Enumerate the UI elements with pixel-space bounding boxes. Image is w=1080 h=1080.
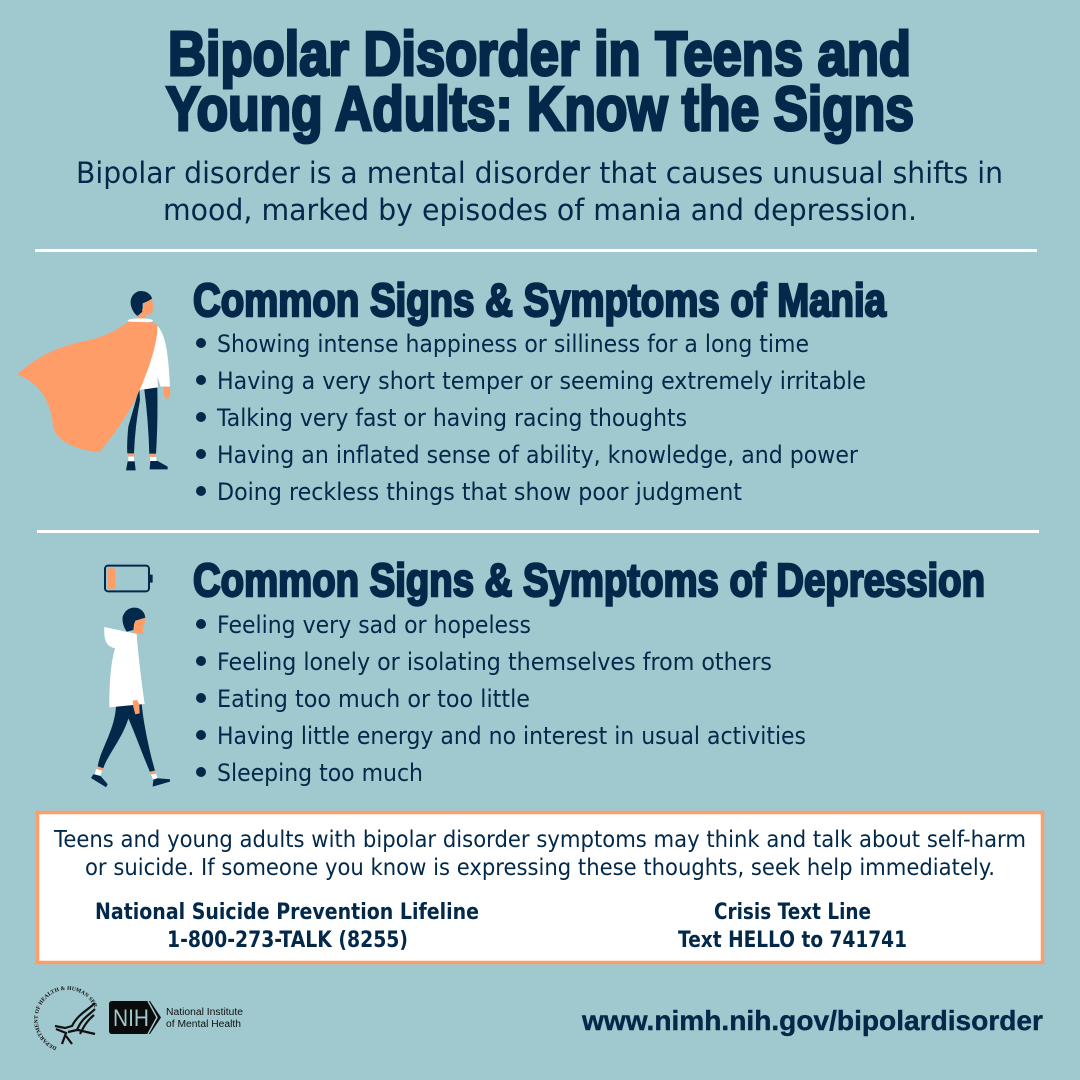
title	[166, 20, 914, 144]
mania symptom list: Doing reckless things that show poor judgment	[217, 478, 742, 506]
icon: low battery	[105, 566, 153, 591]
crisis text line contact: Crisis Text Line	[714, 899, 871, 925]
mania symptom list	[196, 330, 866, 506]
warning text: or suicide. If someone you know is expressing these thoughts, seek help immediately.	[85, 855, 995, 881]
intro text: Bipolar disorder is a mental disorder that causes unusual shifts in	[76, 156, 1003, 190]
NIH logo: of Mental Health	[166, 1019, 241, 1030]
icon: superhero figure with cape	[17, 291, 170, 470]
NIH logo: NIH	[113, 1005, 149, 1032]
HHS logo	[34, 986, 98, 1050]
crisis text line contact: Text HELLO to 741741	[678, 927, 907, 953]
depression symptom list: Having little energy and no interest in usual activities	[217, 722, 806, 750]
mania symptom list: Having an inflated sense of ability, knowledge, and power	[217, 441, 858, 469]
NIH logo: National Institute	[166, 1007, 243, 1018]
intro text	[76, 156, 1003, 227]
warning text: Teens and young adults with bipolar disorder symptoms may think and talk about self-harm	[53, 827, 1026, 853]
intro text: mood, marked by episodes of mania and depression.	[163, 193, 917, 227]
lifeline contact	[95, 899, 479, 953]
crisis text line contact	[678, 899, 907, 953]
website url: www.nimh.nih.gov/bipolardisorder	[581, 1005, 1043, 1036]
NIH logo	[109, 1001, 243, 1034]
HHS logo: DEPARTMENT OF HEALTH & HUMAN SERVICES · USA	[34, 986, 98, 1050]
depression symptom list: Feeling lonely or isolating themselves from others	[217, 648, 772, 676]
lifeline contact: 1-800-273-TALK (8255)	[167, 927, 408, 953]
depression symptom list	[196, 611, 806, 787]
mania symptom list: Having a very short temper or seeming extremely irritable	[217, 367, 866, 395]
heading: mania: Common Signs & Symptoms of Mania	[193, 274, 886, 326]
depression symptom list: Feeling very sad or hopeless	[217, 611, 531, 639]
title: Bipolar Disorder in Teens and	[168, 20, 911, 89]
lifeline contact: National Suicide Prevention Lifeline	[95, 899, 479, 925]
mania symptom list: Showing intense happiness or silliness for a long time	[217, 330, 809, 358]
warning text	[53, 827, 1026, 881]
title: Young Adults: Know the Signs	[166, 75, 914, 144]
depression symptom list: Eating too much or too little	[217, 685, 530, 713]
callout box	[38, 812, 1042, 962]
depression symptom list: Sleeping too much	[217, 759, 423, 787]
mania symptom list: Talking very fast or having racing thoughts	[216, 404, 687, 432]
icon: walking figure	[91, 608, 170, 787]
